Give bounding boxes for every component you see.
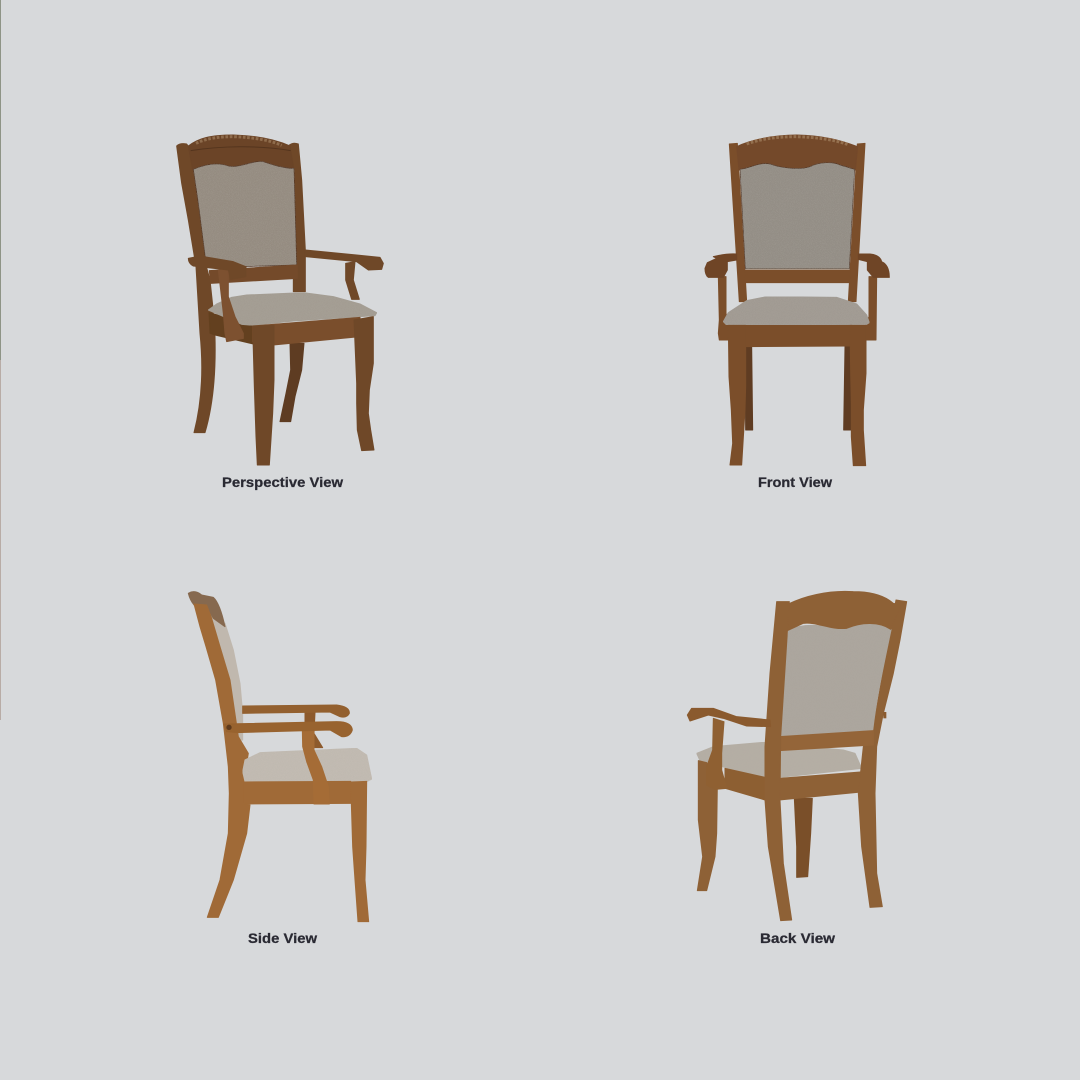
chair: back view — [687, 591, 907, 921]
seat cushion — [723, 297, 869, 325]
far arm support — [305, 713, 323, 748]
right armrest — [305, 250, 383, 270]
near armrest — [224, 722, 352, 737]
back cushion edge — [210, 615, 243, 740]
arm support — [707, 718, 727, 789]
back cushion — [780, 623, 891, 737]
back cushion — [193, 161, 297, 268]
far arm stub — [883, 712, 886, 718]
far front leg — [794, 798, 812, 877]
crest edge — [188, 592, 225, 627]
rear right leg — [280, 343, 304, 422]
carved crest rail — [737, 135, 858, 170]
left armrest — [188, 256, 246, 279]
left stile and leg — [765, 602, 792, 921]
arm bolt — [226, 725, 232, 730]
right arm support — [346, 262, 359, 299]
rear rail — [779, 772, 865, 800]
apron — [244, 781, 351, 804]
lower back rail — [779, 731, 873, 751]
label: side view: Side View — [248, 931, 318, 946]
front left leg — [728, 325, 746, 465]
front right leg — [354, 317, 374, 451]
seat cushion — [208, 293, 377, 325]
left armrest — [705, 254, 737, 277]
lower back rail — [209, 265, 297, 283]
right stile and leg — [858, 600, 907, 907]
left front leg — [697, 761, 717, 891]
label: back view: Back View — [760, 931, 836, 946]
carved crest rail — [188, 135, 294, 170]
left apron — [209, 313, 253, 344]
front centre leg — [253, 325, 274, 465]
chair: perspective view — [177, 135, 383, 465]
stiles — [729, 143, 865, 302]
lower back rail — [745, 270, 850, 283]
near arm support — [302, 730, 329, 804]
front apron — [253, 317, 360, 345]
right arm support — [866, 277, 877, 340]
armrest — [687, 708, 771, 727]
chair: side view — [188, 592, 372, 922]
stile and rear leg — [194, 604, 250, 917]
left edge strip: green-grey — [0, 0, 1, 360]
left arm support — [218, 270, 243, 342]
left edge strip: brown-grey — [0, 360, 1, 720]
crest carving — [196, 137, 282, 145]
front right leg — [850, 325, 866, 466]
seat cushion — [243, 748, 372, 782]
chair: front view — [705, 135, 889, 466]
crest rail — [787, 591, 902, 631]
rear legs — [745, 347, 851, 430]
crest moulding line — [191, 147, 291, 151]
front leg — [351, 781, 369, 922]
crest carving — [747, 137, 848, 145]
right stile — [289, 143, 305, 292]
left arm support — [718, 277, 729, 340]
left apron — [725, 768, 765, 800]
label: front view: Front View — [758, 475, 833, 490]
back cushion — [740, 163, 855, 269]
front apron — [743, 325, 852, 347]
left stile and rear leg — [177, 144, 215, 433]
seat cushion — [697, 742, 862, 777]
label: perspective view: Perspective View — [222, 475, 344, 490]
far armrest — [243, 705, 349, 717]
right armrest — [858, 254, 889, 277]
